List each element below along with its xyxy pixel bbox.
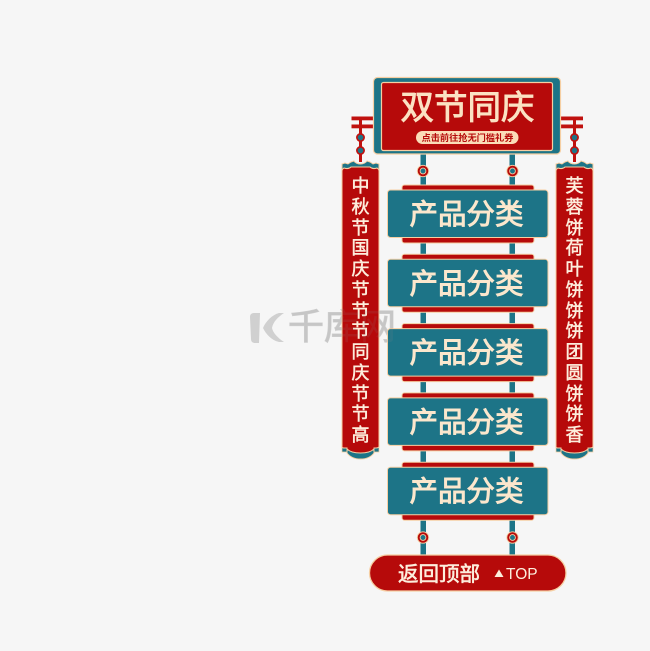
left scroll text: 节 (352, 321, 370, 341)
watermark overlay: 千库网 (288, 306, 396, 347)
coupon pill: 点击前往抢无门槛礼券 (422, 132, 514, 143)
icon: up triangle (494, 570, 504, 577)
right scroll text: 饼 (566, 321, 584, 341)
right scroll text: 叶 (566, 259, 584, 279)
left scroll text: 国 (352, 238, 370, 258)
category button 5 (388, 462, 548, 520)
category button 1: 产品分类 (409, 199, 524, 231)
right hanger (561, 116, 583, 162)
left scroll text: 同 (352, 342, 370, 362)
category button 3: 产品分类 (409, 338, 524, 370)
left hanger (352, 116, 374, 162)
post knots (417, 165, 518, 543)
hanging posts (420, 154, 515, 556)
left scroll text: 节 (352, 280, 370, 300)
panel: header sign (374, 78, 560, 154)
coupon pill (416, 131, 518, 144)
left scroll text: 节 (352, 404, 370, 424)
back to top button: TOP (506, 566, 538, 583)
panel: left scroll (342, 161, 379, 459)
left scroll text: 庆 (352, 363, 370, 383)
category button 1 (388, 185, 548, 243)
right scroll text: 饼 (566, 384, 584, 404)
right scroll text: 蓉 (566, 197, 584, 217)
panel: right scroll (556, 161, 593, 459)
category button 2 (388, 254, 548, 312)
right scroll text: 饼 (566, 218, 584, 238)
left scroll text: 中 (352, 176, 370, 196)
back to top button: 返回顶部 (398, 563, 480, 586)
right scroll text: 饼 (566, 404, 584, 424)
title: 双节同庆 (400, 90, 534, 127)
category button 5: 产品分类 (409, 476, 524, 508)
right scroll text: 芙 (566, 176, 584, 196)
category button 3 (388, 324, 548, 382)
right scroll text: 饼 (566, 301, 584, 321)
right scroll text: 香 (566, 425, 584, 445)
left scroll text: 高 (352, 425, 370, 445)
left scroll text: 秋 (352, 197, 370, 217)
category button 4 (388, 393, 548, 451)
left scroll text: 节 (352, 218, 370, 238)
category button 4: 产品分类 (409, 407, 524, 439)
right scroll text: 饼 (566, 280, 584, 300)
category button 2: 产品分类 (409, 268, 524, 300)
back to top button (370, 555, 566, 591)
left scroll text: 节 (352, 301, 370, 321)
right scroll text: 圆 (566, 363, 584, 383)
right scroll text (566, 176, 584, 445)
left scroll text: 庆 (352, 259, 370, 279)
right scroll text: 团 (566, 342, 584, 362)
left scroll text (352, 176, 370, 445)
watermark logo: 千库网 (288, 306, 396, 347)
left scroll text: 节 (352, 384, 370, 404)
right scroll text: 荷 (566, 238, 584, 258)
